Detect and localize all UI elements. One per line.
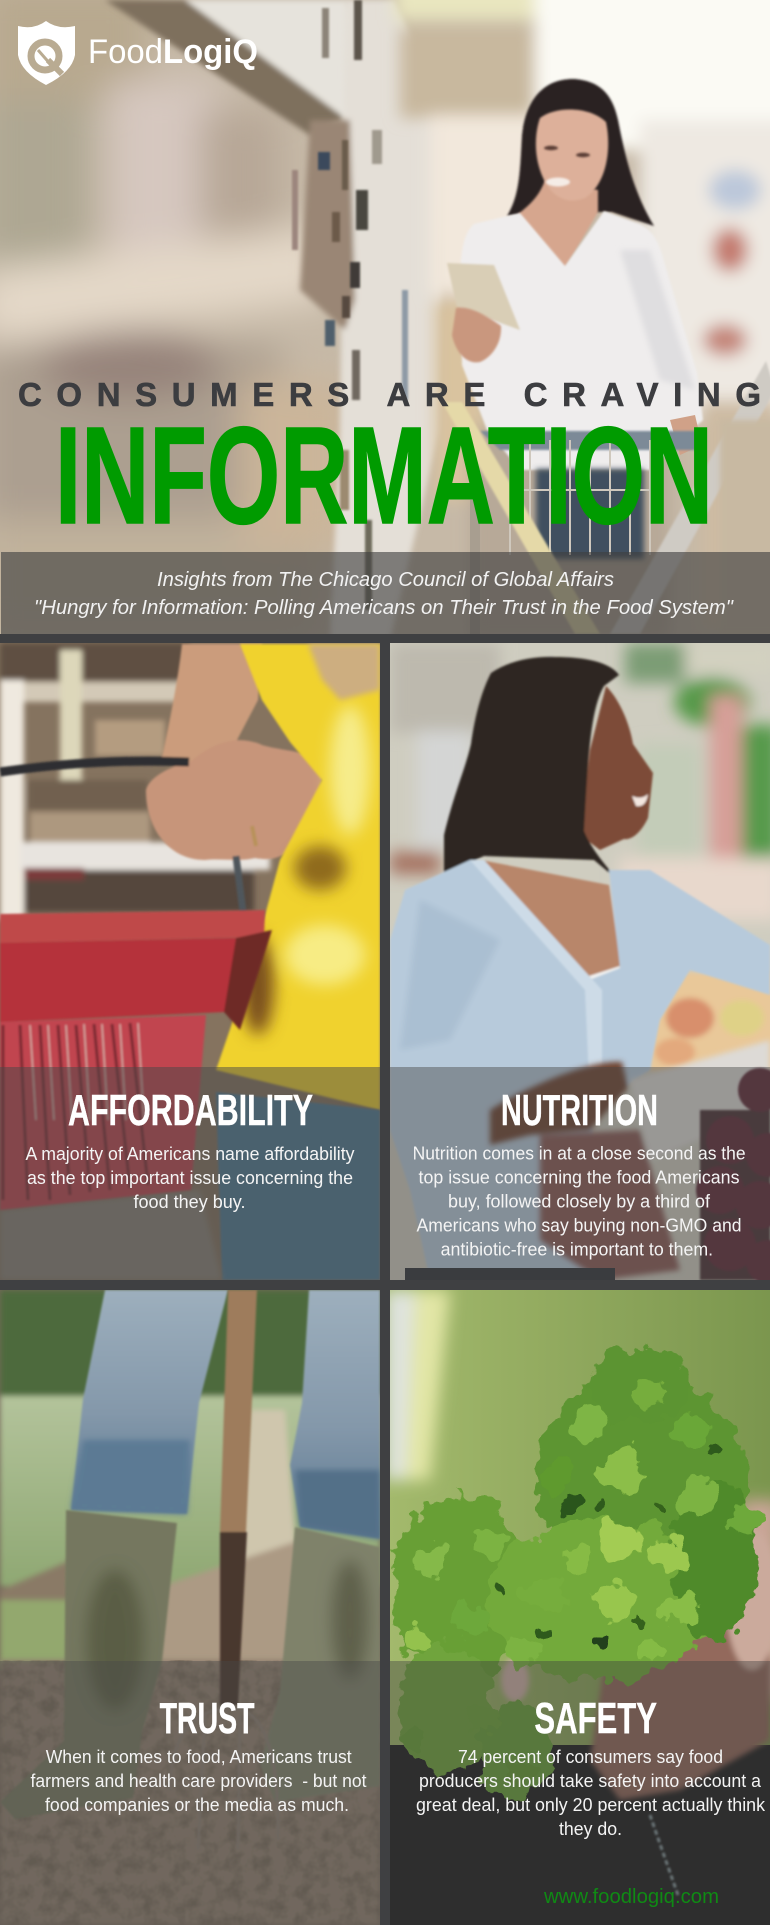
text block: nutrition: antibiotic-free is important to them. bbox=[441, 1240, 713, 1260]
water bbox=[650, 1815, 678, 1895]
jeans bbox=[405, 1268, 615, 1280]
jeans bbox=[71, 1290, 380, 1539]
text: wordmark: FoodLogiQ bbox=[88, 33, 258, 71]
text block: nutrition: Americans who say buying non-GMO and bbox=[416, 1216, 742, 1236]
heading: affordability: AFFORDABILITY bbox=[68, 1086, 313, 1135]
text block: nutrition: Nutrition comes in at a close second as the bbox=[413, 1144, 746, 1164]
hand bbox=[452, 308, 501, 362]
face bbox=[580, 686, 653, 850]
apples bbox=[650, 972, 770, 1072]
heading: nutrition: NUTRITION bbox=[501, 1086, 658, 1135]
dark produce bbox=[696, 1068, 770, 1284]
text block: trust: farmers and health care providers - but not bbox=[30, 1771, 366, 1791]
top shelf wedge bbox=[106, 0, 348, 136]
panel: hero photo of shopper in store aisle bbox=[0, 0, 770, 640]
text block: nutrition bbox=[413, 1144, 746, 1260]
pitchfork bbox=[170, 1290, 278, 1850]
text block: affordability bbox=[26, 1144, 354, 1212]
hair ends bbox=[308, 644, 380, 700]
overlay panel bbox=[0, 1661, 380, 1925]
jeans bbox=[216, 1092, 380, 1280]
text block: trust: When it comes to food, Americans trust bbox=[46, 1747, 352, 1767]
text block: affordability: A majority of Americans name affordability bbox=[26, 1144, 354, 1164]
overlay panel bbox=[390, 1661, 770, 1925]
text block: nutrition: buy, followed closely by a third of bbox=[448, 1192, 711, 1212]
blurred store background bbox=[0, 643, 270, 920]
panel: subtitle bar bbox=[1, 552, 770, 634]
text block: safety: great deal, but only 20 percent actually think bbox=[416, 1795, 766, 1815]
blurred store background bbox=[390, 643, 770, 920]
logo: FoodLogiQ bbox=[18, 21, 258, 85]
text block: report title: "Hungry for Information: Polling Americans on Their Trust in the Food System" bbox=[34, 597, 734, 619]
text block: trust bbox=[30, 1747, 366, 1815]
panel: trust bbox=[0, 1290, 380, 1925]
heading: trust: TRUST bbox=[160, 1694, 255, 1743]
hands bbox=[501, 1530, 770, 1800]
text block: safety: producers should take safety into account a bbox=[419, 1771, 762, 1791]
heading: consumers are craving: CONSUMERS ARE CRAVING bbox=[18, 376, 761, 413]
overlay panel bbox=[390, 1067, 770, 1280]
dark lower background bbox=[390, 1745, 770, 1925]
text block: safety: 74 percent of consumers say food bbox=[458, 1747, 723, 1767]
arm and fist bbox=[0, 644, 322, 912]
panel: affordability bbox=[0, 643, 380, 1280]
shopper figure bbox=[447, 79, 703, 470]
lettuce bbox=[392, 1347, 759, 1800]
woman bbox=[390, 657, 770, 1280]
text block: safety bbox=[416, 1747, 766, 1839]
text block: safety: they do. bbox=[559, 1819, 622, 1839]
smile bbox=[632, 794, 648, 806]
panel: nutrition bbox=[390, 643, 770, 1284]
neck and chest bbox=[518, 180, 598, 268]
soil bbox=[0, 1660, 380, 1925]
text block: affordability: food they buy. bbox=[134, 1192, 246, 1212]
shelf goods strip bbox=[300, 0, 445, 640]
text block: trust: food companies or the media as much. bbox=[45, 1795, 349, 1815]
text block: affordability: as the top important issue concerning the bbox=[27, 1168, 353, 1188]
cardigan bbox=[390, 860, 770, 1280]
heading: safety: SAFETY bbox=[534, 1694, 657, 1743]
shopping cart bbox=[442, 361, 770, 634]
face bbox=[536, 109, 608, 201]
website url: www.foodlogiq.com bbox=[543, 1886, 719, 1908]
blurred background bbox=[385, 1290, 770, 1700]
icon: shield bbox=[18, 21, 75, 85]
floor bbox=[0, 1190, 222, 1280]
overlay panel bbox=[0, 1067, 380, 1280]
eyes and smile bbox=[544, 146, 590, 186]
hand with bag bbox=[490, 1040, 770, 1280]
text block: nutrition: top issue concerning the food Americans bbox=[418, 1168, 740, 1188]
shirt bbox=[460, 211, 703, 470]
rubber boots bbox=[0, 1510, 380, 1819]
background right and centre bbox=[391, 0, 770, 552]
hair bbox=[444, 657, 619, 881]
text block: source line: Insights from The Chicago Council of Global Affairs bbox=[157, 569, 614, 591]
hair bbox=[507, 79, 654, 226]
paper bbox=[447, 263, 520, 330]
red basket bbox=[0, 910, 272, 1210]
chest bbox=[481, 860, 621, 978]
yellow shirt bbox=[216, 644, 380, 1110]
panel: safety bbox=[385, 1290, 770, 1925]
field background bbox=[0, 1290, 380, 1680]
